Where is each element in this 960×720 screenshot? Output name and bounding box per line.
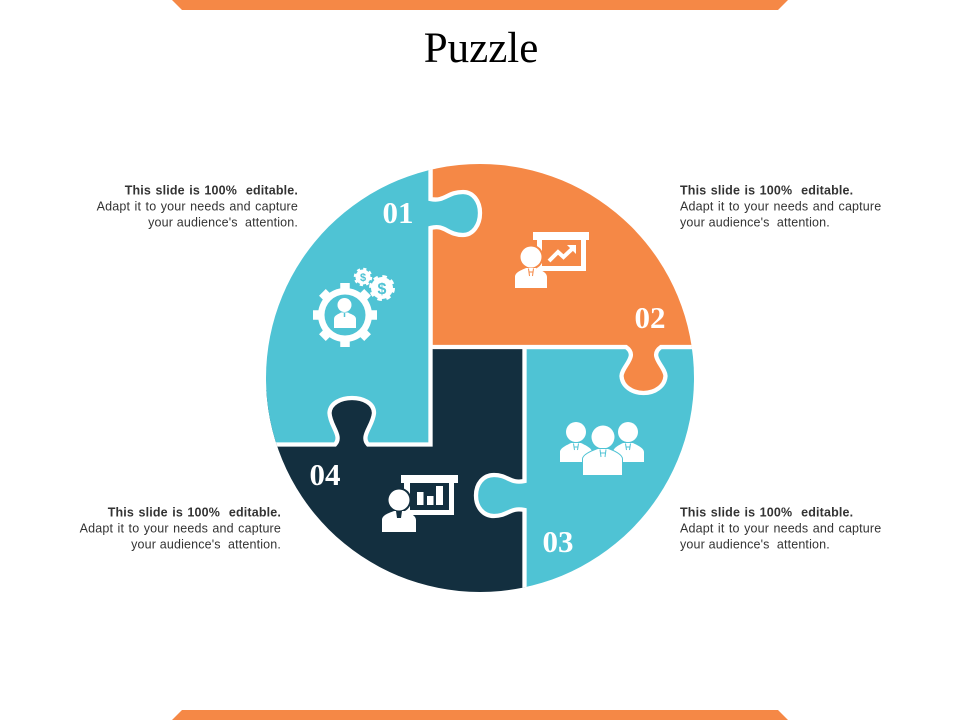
puzzle circle — [266, 164, 694, 592]
text block: top left — [97, 184, 298, 230]
text block: bottom right: This slide is 100% editable. — [680, 506, 853, 520]
icon: gear with person and dollar gears: $ — [360, 272, 366, 284]
text block: bottom left: your audience's attention. — [131, 538, 281, 552]
top orange bar — [172, 0, 788, 10]
icon: presenter with growth chart — [515, 232, 589, 288]
icon: gear with person and dollar gears — [313, 269, 394, 347]
text block: top right: your audience's attention. — [680, 216, 830, 230]
text block: top left: your audience's attention. — [148, 216, 298, 230]
text block: bottom left: This slide is 100% editable. — [108, 506, 281, 520]
text block: top left: This slide is 100% editable. — [125, 184, 298, 198]
text block: top right: Adapt it to your needs and capture — [680, 200, 881, 214]
icon: presenter with bar chart — [382, 475, 458, 532]
text block: top right — [680, 184, 881, 230]
text block: top right: This slide is 100% editable. — [680, 184, 853, 198]
piece 04: navy — [266, 349, 524, 592]
text block: bottom right: your audience's attention. — [680, 538, 830, 552]
icon: gear with person and dollar gears: $ — [378, 281, 387, 298]
text block: bottom left: Adapt it to your needs and capture — [80, 522, 281, 536]
bottom orange bar — [172, 710, 788, 720]
title: Puzzle — [424, 25, 538, 72]
text block: top left: Adapt it to your needs and capture — [97, 200, 298, 214]
text block: bottom right: Adapt it to your needs and capture — [680, 522, 881, 536]
icon: team of three people — [560, 422, 644, 475]
text block: bottom right — [680, 506, 881, 552]
piece 01: blue — [266, 170, 482, 447]
piece 02: orange — [430, 164, 692, 396]
text block: bottom left — [80, 506, 281, 552]
number 01: 01 — [382, 195, 414, 230]
piece 03: blue — [474, 347, 694, 588]
number 03: 03 — [542, 524, 574, 559]
number 04: 04 — [310, 457, 340, 492]
number 02: 02 — [634, 300, 666, 335]
